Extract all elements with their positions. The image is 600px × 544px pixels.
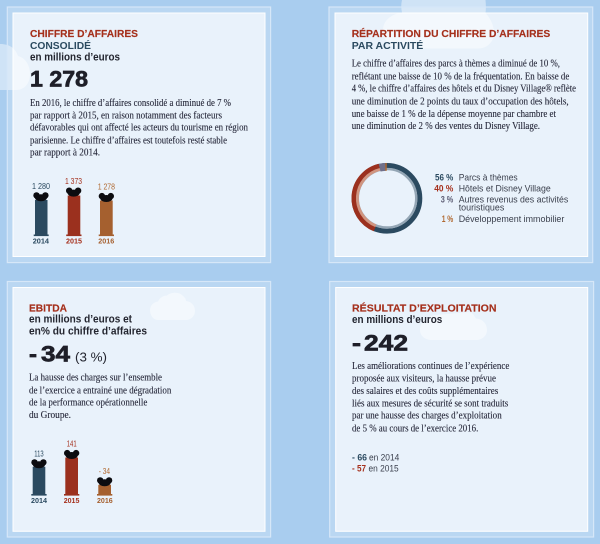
- bar 2015: [65, 177, 82, 246]
- heading: en% du chiffre d’affaires: [29, 325, 147, 337]
- legend item: autres revenus: Autres revenus des activités: [459, 195, 569, 205]
- bar 2015: 2015: [66, 237, 82, 246]
- bar 2014: 1 280: [32, 182, 50, 191]
- bar 2014: 2014: [31, 496, 48, 505]
- body text: une diminution de 2 points du taux d’occupation des hôtels,: [352, 96, 569, 107]
- body text: La hausse des charges sur l’ensemble: [29, 373, 162, 384]
- heading: [352, 301, 497, 326]
- body text: par une hausse des charges d’exploitation: [352, 411, 502, 422]
- body text: Les améliorations continues de l’expérience: [352, 361, 510, 372]
- bar chart: chiffre d'affaires: [32, 177, 115, 246]
- heading: PAR ACTIVITÉ: [352, 39, 423, 52]
- cloud: left edge: [0, 44, 30, 90]
- heading: RÉPARTITION DU CHIFFRE D’AFFAIRES: [352, 27, 550, 40]
- segment: parcs à thèmes: [354, 166, 420, 231]
- key figure: [29, 341, 107, 366]
- key figure: 1 278: [30, 67, 88, 92]
- panel: EBITDA: [7, 282, 271, 537]
- body text: du Groupe.: [29, 410, 71, 421]
- key figure: -: [352, 330, 361, 355]
- heading: en millions d’euros: [352, 314, 442, 326]
- body text: En 2016, le chiffre d’affaires consolidé a diminué de 7 %: [30, 98, 231, 109]
- heading: RÉSULTAT D’EXPLOITATION: [352, 301, 497, 314]
- cloud: [150, 293, 195, 320]
- bar 2015: [64, 439, 79, 505]
- bar 2015: 1 373: [65, 177, 82, 186]
- key figure: 34: [41, 341, 71, 366]
- figure 2015: en 2015: [368, 463, 399, 473]
- body text: des salaires et des coûts supplémentaires: [352, 386, 498, 397]
- heading: [30, 28, 138, 64]
- figure 2014: - 66: [352, 452, 367, 462]
- body text: par rapport à 2015, en raison notamment des facteurs: [30, 110, 222, 121]
- figure 2015: - 57: [352, 463, 366, 473]
- segment: hôtels et Disney Village: [354, 166, 380, 229]
- segment: développement immobilier: [385, 163, 387, 171]
- donut chart: [354, 163, 420, 231]
- bar 2014: [32, 182, 50, 246]
- heading: CHIFFRE D’AFFAIRES: [30, 28, 138, 40]
- key figure: (3 %): [75, 349, 107, 364]
- comparison figures: [352, 452, 399, 473]
- body text: [352, 361, 510, 434]
- bar 2015: 141: [67, 439, 77, 448]
- body text: [352, 59, 576, 132]
- bar 2014: 2014: [33, 237, 50, 246]
- body text: de la performance opérationnelle: [29, 398, 148, 409]
- body text: liés aux mesures de sécurité se sont traduits: [352, 398, 508, 409]
- legend item: parcs à thèmes: [435, 172, 518, 182]
- legend item: hôtels: Hôtels et Disney Village: [459, 183, 551, 193]
- panel: chiffre d'affaires consolidé: [0, 7, 271, 263]
- bar chart: EBITDA: [31, 439, 113, 505]
- body text: de 5 % au cours de l’exercice 2016.: [352, 423, 478, 434]
- cloud: [420, 312, 487, 340]
- bar 2016: - 34: [99, 467, 110, 476]
- bar 2014: 113: [34, 449, 44, 458]
- key figure: 242: [364, 330, 408, 355]
- body text: [29, 373, 172, 421]
- legend item: autres revenus: 3 %: [441, 195, 453, 205]
- segment: autres revenus: [380, 163, 385, 172]
- legend item: parcs à thèmes: 56 %: [435, 172, 453, 182]
- heading: [29, 302, 147, 337]
- legend item: développement immobilier: Développement immobilier: [459, 214, 564, 224]
- legend item: parcs à thèmes: Parcs à thèmes: [459, 172, 518, 182]
- bar 2016: 1 278: [98, 182, 115, 191]
- body text: [30, 98, 249, 159]
- body text: défavorables qui ont affecté les acteurs du tourisme en région: [30, 123, 249, 134]
- body text: proposée aux visiteurs, la hausse prévue: [352, 374, 496, 385]
- bar 2015: 2015: [64, 496, 79, 505]
- heading: en millions d’euros: [30, 52, 120, 64]
- heading: [352, 27, 550, 52]
- bar 2016: [98, 182, 115, 246]
- legend: [434, 172, 569, 224]
- figure 2014: [352, 452, 399, 462]
- heading: EBITDA: [29, 302, 67, 314]
- body text: Le chiffre d’affaires des parcs à thèmes a diminué de 10 %,: [352, 59, 560, 70]
- bar 2016: 2016: [97, 496, 113, 505]
- body text: de l’exercice a entrainé une dégradation: [29, 385, 172, 396]
- legend item: développement immobilier: 1 %: [442, 214, 453, 224]
- body text: par rapport à 2014.: [30, 148, 100, 159]
- bar 2016: 2016: [98, 237, 114, 246]
- body text: une diminution de 2 % des ventes du Disney Village.: [352, 121, 540, 132]
- key figure: -: [29, 341, 37, 366]
- body text: parisienne. Le chiffre d’affaires est toutefois resté stable: [30, 135, 227, 146]
- heading: CONSOLIDÉ: [30, 39, 91, 52]
- figure 2014: en 2014: [369, 452, 399, 462]
- body text: une baisse de 1 % de la dépense moyenne par chambre et: [352, 109, 556, 120]
- legend item: hôtels: 40 %: [434, 183, 453, 193]
- key figure: [352, 330, 408, 355]
- legend item: autres revenus: [441, 195, 569, 212]
- cloud: top: [383, 0, 494, 48]
- heading: en millions d’euros et: [29, 314, 132, 326]
- legend item: autres revenus: touristiques: [459, 202, 505, 212]
- bar 2014: [31, 449, 48, 505]
- panel: répartition par activité: [329, 0, 593, 263]
- figure 2015: [352, 463, 399, 473]
- panel: résultat d'exploitation: [330, 282, 594, 537]
- bar 2016: [97, 467, 113, 505]
